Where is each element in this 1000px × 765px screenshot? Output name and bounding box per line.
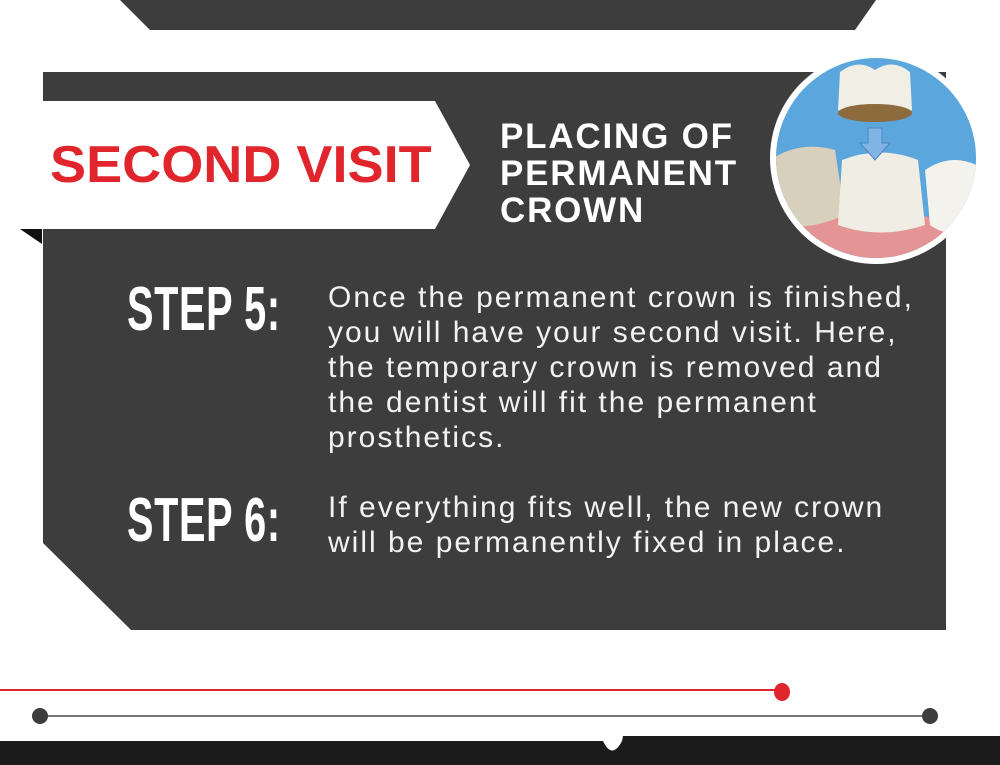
step 5 text: you will have your second visit. Here, [328,316,898,349]
subtitle: placing of permanent crown: PERMANENT [500,154,738,193]
label shadow [20,229,42,244]
step 5 text: the temporary crown is removed and [328,351,883,384]
step 5 text [328,281,914,454]
red progress line [0,683,790,701]
bottom black band [0,736,1000,765]
step 6 label: STEP 6: [127,486,281,555]
crown image circle [770,58,976,264]
step 6 text: will be permanently fixed in place. [328,526,847,559]
step 5 text: Once the permanent crown is finished, [328,281,914,314]
step 6 text: If everything fits well, the new crown [328,491,884,524]
step 5 label: STEP 5: [127,275,281,344]
subtitle: placing of permanent crown: CROWN [500,191,645,230]
gray timeline [32,708,938,724]
label: second visit banner [20,101,470,229]
step 5 text: the dentist will fit the permanent [328,386,818,419]
top dark banner [120,0,876,30]
step 5 text: prosthetics. [328,421,505,454]
step 6 text [328,491,884,559]
title: second visit: SECOND VISIT [50,136,432,194]
subtitle: placing of permanent crown: PLACING OF [500,117,734,156]
main dark panel [43,72,946,630]
subtitle: placing of permanent crown [500,117,738,230]
